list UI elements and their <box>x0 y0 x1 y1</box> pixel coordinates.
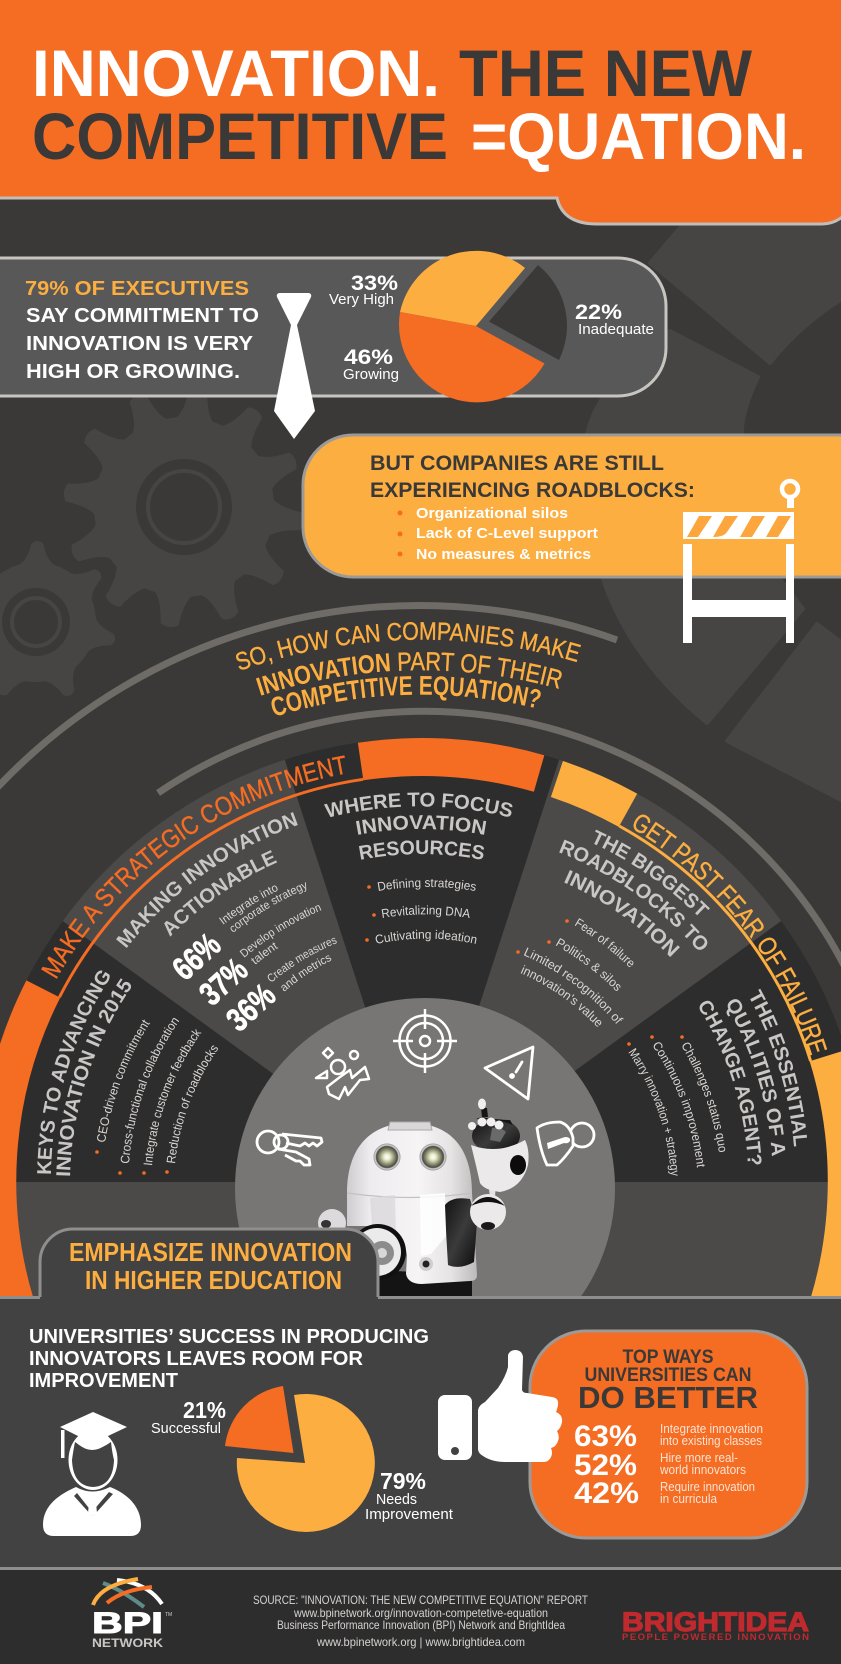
pie chart: commitment <box>399 251 567 402</box>
wedge: the essential qualities of a change agent: CHANGE AGENT? <box>700 1000 762 1164</box>
ring band: get past fear of failure: GET PAST FEAR OF FAILURE <box>634 814 828 1056</box>
background: small gear <box>0 541 119 704</box>
pie labels: 21% <box>183 1397 226 1423</box>
pie labels: 79% <box>380 1468 426 1494</box>
footer <box>0 1568 841 1664</box>
wedge: where to focus innovation resources: INNOVATION <box>356 815 486 835</box>
tab: emphasize innovation in higher education: IN HIGHER EDUCATION <box>85 1265 342 1295</box>
wedge: the biggest roadblocks to innovation: ROADBLOCKS TO <box>559 840 708 950</box>
title <box>32 36 806 173</box>
panel: executives commitment <box>0 251 666 439</box>
source text: SOURCE: "INNOVATION: THE NEW COMPETITIVE EQUATION" REPORT <box>253 1593 589 1607</box>
pie labels: Improvement <box>365 1506 454 1523</box>
wedge: where to focus innovation resources: Cultivating ideation <box>376 930 476 944</box>
wedge: making innovation actionable: Create measures <box>268 938 337 982</box>
wedge: the essential qualities of a change agent: Continuous improvement <box>654 1042 705 1168</box>
text: 79 percent of executives: SAY COMMITMENT TO <box>26 304 259 327</box>
wedge: the biggest roadblocks to innovation: Limited recognition of <box>524 948 624 1024</box>
heading: how can companies make innovation part of their competitive equation: SO, HOW CAN COMPANIES MAKE <box>236 622 581 670</box>
icon: target <box>393 1009 457 1073</box>
pie labels <box>151 1397 454 1523</box>
background: large gear blocks <box>587 200 841 802</box>
wedge: where to focus innovation resources: Revitalizing DNA <box>382 905 470 918</box>
source text: www.bpinetwork.org/innovation-competetive-equation <box>293 1606 548 1620</box>
icon: people and shapes <box>316 1048 369 1099</box>
wedge: the biggest roadblocks to innovation: INNOVATION <box>564 870 680 957</box>
wedge: the essential qualities of a change agent: Challenges status quo <box>682 1042 726 1152</box>
panel: top ways universities can do better: into existing classes <box>660 1433 762 1448</box>
panel: roadblocks <box>303 435 841 643</box>
wedge: making innovation actionable: corporate strategy <box>230 882 306 932</box>
text: 79 percent of executives: HIGH OR GROWING. <box>26 360 240 383</box>
logo: Brightidea: BRIGHTIDEA <box>622 1607 809 1637</box>
wedge: where to focus innovation resources: WHERE TO FOCUS <box>324 792 512 818</box>
wedge: making innovation actionable: MAKING INNOVATION <box>116 812 298 948</box>
panel: top ways universities can do better: DO BETTER <box>578 1380 758 1415</box>
panel: top ways universities can do better: Integrate innovation <box>660 1421 763 1436</box>
logo: BPI Network: NETWORK <box>92 1636 163 1650</box>
pie labels: Inadequate <box>578 322 654 338</box>
heading: roadblocks: BUT COMPANIES ARE STILL <box>370 452 664 475</box>
wedge: keys to advancing innovation in 2015: Reduction of roadblocks <box>166 1046 218 1163</box>
wedge: making innovation actionable <box>63 760 365 1074</box>
yellow box <box>303 435 841 577</box>
illustration: robot <box>318 1098 529 1297</box>
wedge: where to focus innovation resources <box>285 742 559 1008</box>
panel: top ways universities can do better: 42% <box>574 1477 639 1510</box>
title: THE NEW <box>459 36 753 110</box>
panel: top ways universities can do better: UNIVERSITIES CAN <box>584 1365 752 1386</box>
wheel of insights <box>0 738 841 1296</box>
panel: top ways universities can do better: TOP WAYS <box>622 1347 714 1368</box>
outer decorative arc <box>0 605 617 790</box>
logo: BPI Network <box>92 1579 172 1650</box>
wedge: keys to advancing innovation in 2015: INNOVATION IN 2015 <box>56 978 131 1176</box>
heading: universities success: INNOVATORS LEAVES ROOM FOR <box>29 1348 364 1370</box>
background: large gear with teeth <box>61 384 307 630</box>
panel: top ways universities can do better: Hire more real- <box>660 1450 738 1465</box>
lower wheel band <box>0 1182 841 1300</box>
section background <box>0 1297 841 1570</box>
heading: roadblocks: EXPERIENCING ROADBLOCKS: <box>370 479 695 502</box>
pie labels: Growing <box>343 367 399 383</box>
wedge: where to focus innovation resources: RESOURCES <box>359 840 484 860</box>
heading: how can companies make innovation part of their competitive equation <box>236 622 581 716</box>
wedge: the essential qualities of a change agent: QUALITIES OF A <box>726 999 786 1156</box>
heading: universities success <box>29 1326 429 1392</box>
heading: roadblocks <box>370 452 695 502</box>
icon: thumbs up <box>438 1350 562 1462</box>
heading: universities success: IMPROVEMENT <box>29 1370 178 1392</box>
pie labels: Successful <box>151 1420 221 1437</box>
heading: how can companies make innovation part of their competitive equation: INNOVATION PART OF THEIR <box>256 652 562 696</box>
pie labels: 22% <box>575 301 622 324</box>
ring band: make a strategic commitment <box>0 738 544 1296</box>
text: 79 percent of executives: INNOVATION IS VERY <box>26 332 253 355</box>
wedge: making innovation actionable: and metrics <box>281 955 332 992</box>
icon: graduate <box>43 1412 141 1536</box>
header banner <box>0 0 841 224</box>
ring band: make a strategic commitment: MAKE A STRATEGIC COMMITMENT <box>41 755 345 979</box>
wedge: making innovation actionable: 66% <box>165 926 228 987</box>
wedge: keys to advancing innovation in 2015: Cross-functional collaboration <box>120 1018 180 1163</box>
tab: emphasize innovation in higher education <box>40 1229 378 1300</box>
wedge: keys to advancing innovation in 2015: KEYS TO ADVANCING <box>37 970 110 1174</box>
panel: top ways universities can do better <box>530 1331 807 1538</box>
pie labels: 33% <box>351 272 398 295</box>
wedge: the biggest roadblocks to innovation: Politics & silos <box>556 938 620 991</box>
title: COMPETITIVE <box>32 99 448 173</box>
pie chart: universities success <box>225 1386 375 1532</box>
pie labels: Very High <box>329 292 394 308</box>
wedge: keys to advancing innovation in 2015: Integrate customer feedback <box>144 1029 202 1165</box>
icon: road barricade <box>683 481 798 643</box>
source text: Business Performance Innovation (BPI) Network and BrightIdea <box>277 1618 565 1632</box>
pill background <box>0 258 666 396</box>
wedge: the biggest roadblocks to innovation: THE BIGGEST <box>594 830 710 916</box>
logo: BPI Network: TM <box>165 1612 172 1618</box>
icon: necktie <box>274 293 315 439</box>
panel: top ways universities can do better: Require innovation <box>660 1479 755 1494</box>
source text: www.bpinetwork.org | www.brightidea.com <box>316 1635 525 1649</box>
wedge: making innovation actionable: 36% <box>219 976 282 1038</box>
panel: top ways universities can do better: 63% <box>574 1420 637 1453</box>
wedge: keys to advancing innovation in 2015: CEO-driven commitment <box>97 1020 150 1142</box>
wedge: the essential qualities of a change agent: THE ESSENTIAL <box>750 988 807 1146</box>
pie labels: Needs <box>376 1491 417 1508</box>
text: 79 percent of executives <box>25 277 259 383</box>
panel: universities section <box>0 1229 841 1570</box>
wedge: the essential qualities of a change agent <box>575 921 841 1182</box>
list: roadblocks <box>398 505 598 563</box>
wedge: where to focus innovation resources: Defining strategies <box>378 878 476 892</box>
list: roadblocks: Lack of C-Level support <box>416 525 598 542</box>
wedge: making innovation actionable: 37% <box>192 951 255 1012</box>
title: INNOVATION. <box>32 36 440 110</box>
icon: person with keyhole <box>537 1122 594 1165</box>
ring band: get past fear of failure <box>550 761 841 1296</box>
pie labels <box>329 272 654 383</box>
wedge: making innovation actionable: talent <box>251 942 278 964</box>
icon: warning triangle <box>485 1047 533 1099</box>
logo: BPI Network: BPI <box>92 1607 163 1640</box>
panel: top ways universities can do better: in curricula <box>660 1491 718 1506</box>
wedge: making innovation actionable: Develop innovation <box>240 905 322 958</box>
list: roadblocks: No measures & metrics <box>416 546 591 563</box>
wedge: the biggest roadblocks to innovation: innovation's value <box>520 965 602 1027</box>
logo: Brightidea: PEOPLE POWERED INNOVATION <box>622 1632 809 1643</box>
wedge: the essential qualities of a change agent: Marry innovation + strategy <box>628 1048 678 1176</box>
wedge: the biggest roadblocks to innovation: Fear of failure <box>574 918 634 967</box>
wedge: keys to advancing innovation in 2015 <box>16 921 273 1182</box>
panel: top ways universities can do better: world innovators <box>659 1462 746 1477</box>
title: =QUATION. <box>471 99 806 173</box>
source text <box>253 1593 589 1649</box>
wedge: making innovation actionable: Integrate into <box>219 886 278 924</box>
center circle <box>235 998 615 1296</box>
wedge: making innovation actionable: ACTIONABLE <box>164 850 277 936</box>
heading: universities success: UNIVERSITIES’ SUCCESS IN PRODUCING <box>29 1326 429 1348</box>
text: 79 percent of executives: 79% OF EXECUTIVES <box>25 277 249 300</box>
heading: how can companies make innovation part of their competitive equation: COMPETITIVE EQUATION? <box>272 676 541 716</box>
wedge: the biggest roadblocks to innovation <box>479 760 781 1071</box>
icon: keys <box>257 1131 322 1165</box>
list: roadblocks: Organizational silos <box>416 505 568 522</box>
tab: emphasize innovation in higher education: EMPHASIZE INNOVATION <box>69 1237 352 1267</box>
panel: top ways universities can do better: 52% <box>574 1449 637 1482</box>
pie labels: 46% <box>344 346 393 369</box>
inner decorative arc <box>158 711 841 977</box>
